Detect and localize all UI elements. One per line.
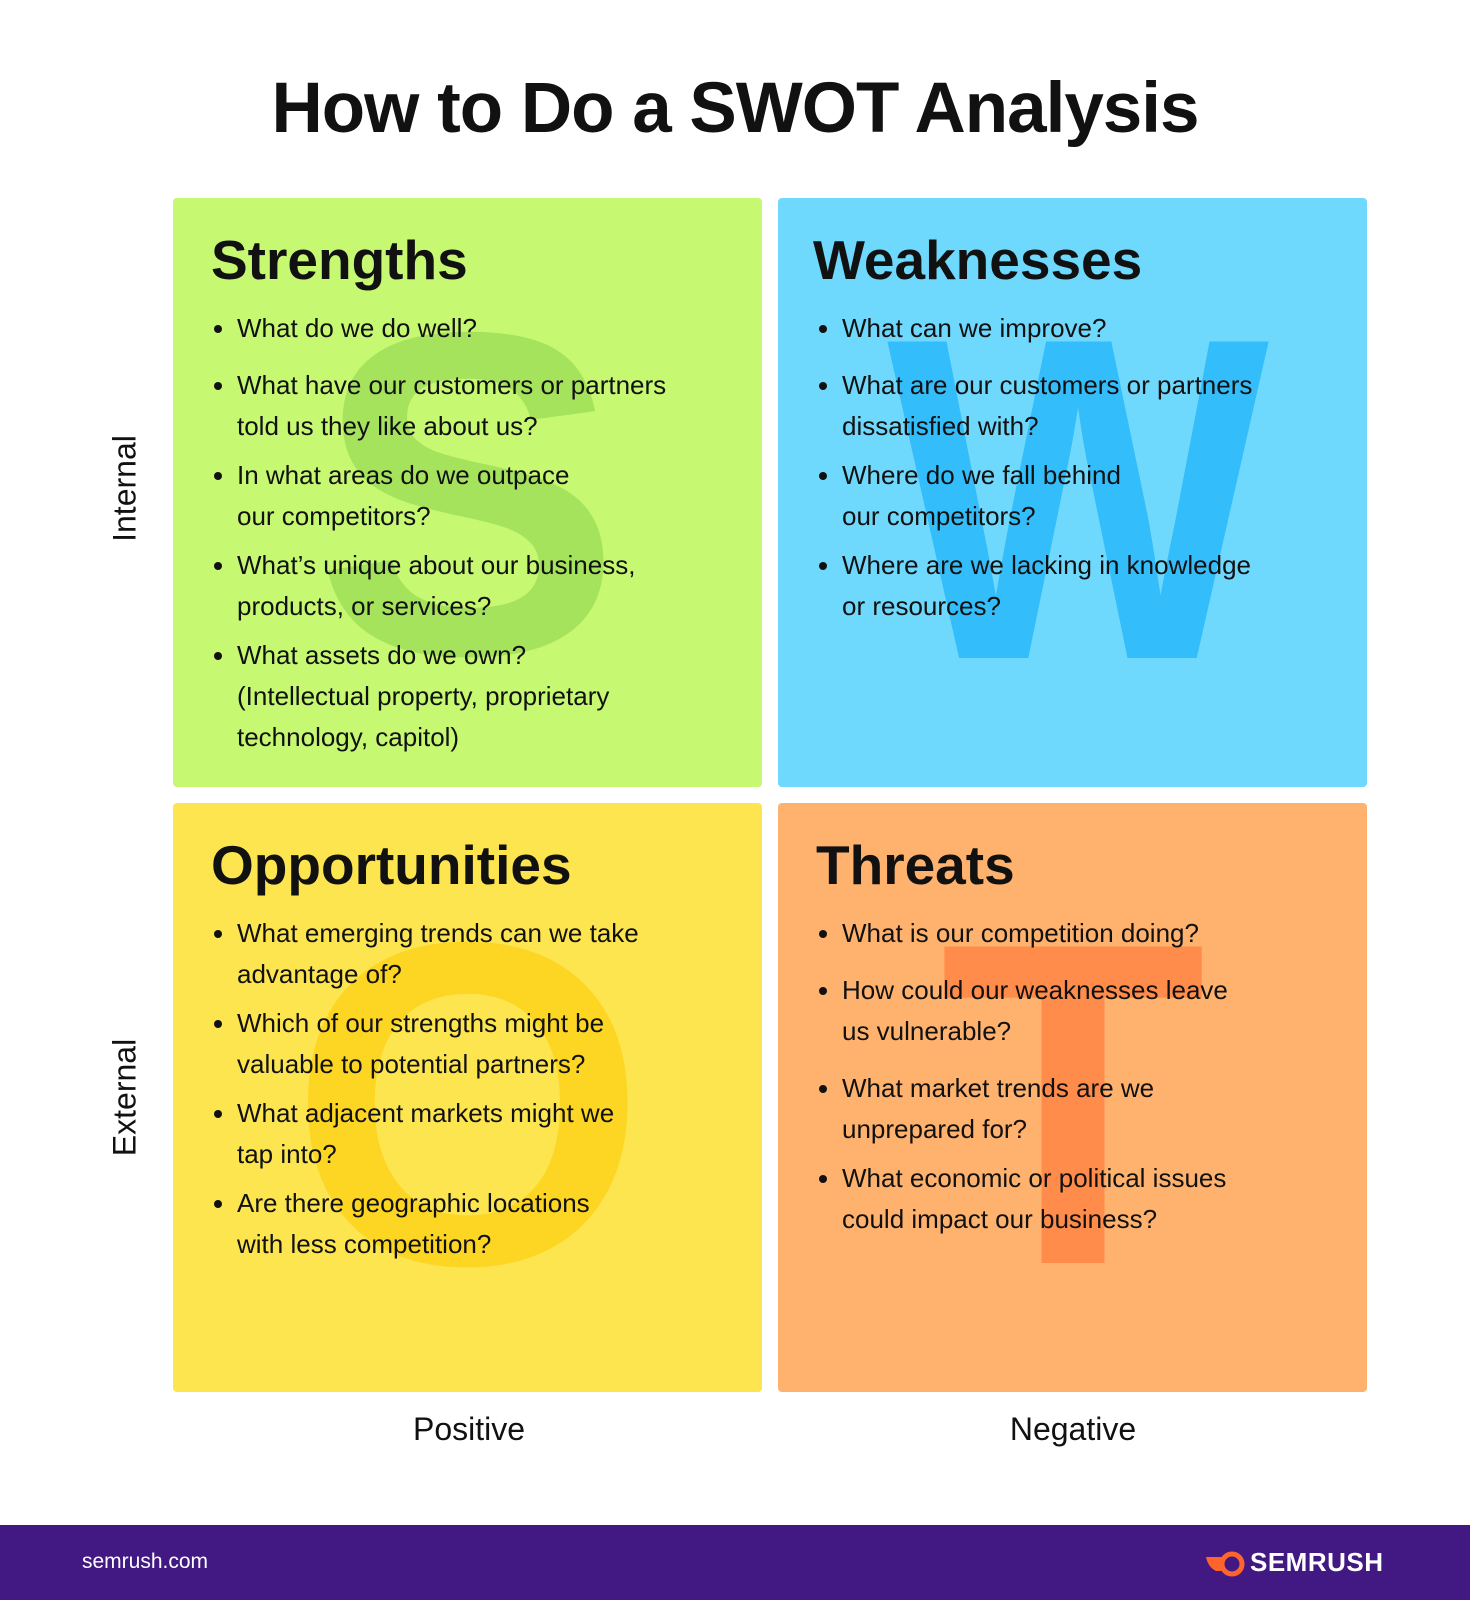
big letter O: O: [289, 848, 647, 1361]
axis label: external: External: [106, 1039, 142, 1156]
list: strengths: What’s unique about our business,: [237, 550, 635, 580]
list: strengths: What have our customers or partners: [237, 370, 666, 400]
list: threats: What economic or political issues: [842, 1163, 1226, 1193]
panel: weaknesses: [778, 198, 1367, 787]
footer: [0, 1525, 1470, 1600]
list: threats: How could our weaknesses leave: [842, 975, 1228, 1005]
list: weaknesses: What can we improve?: [842, 313, 1106, 343]
list: opportunities: Are there geographic locations: [237, 1188, 590, 1218]
list: opportunities: with less competition?: [237, 1229, 491, 1259]
big letter S: S: [315, 238, 621, 751]
list: strengths: products, or services?: [237, 591, 491, 621]
list: weaknesses: our competitors?: [842, 501, 1036, 531]
list: strengths: told us they like about us?: [237, 411, 538, 441]
list: opportunities: Which of our strengths might be: [237, 1008, 604, 1038]
title: How to Do a SWOT Analysis: [271, 69, 1199, 148]
list: threats: unprepared for?: [842, 1114, 1027, 1144]
list: strengths: (Intellectual property, proprietary: [237, 681, 609, 711]
panel: opportunities: [173, 803, 762, 1392]
list: strengths: our competitors?: [237, 501, 431, 531]
axis label: internal: Internal: [106, 435, 142, 542]
list: opportunities: [214, 918, 639, 1259]
list: weaknesses: dissatisfied with?: [842, 411, 1039, 441]
list: weaknesses: [819, 313, 1252, 621]
logo: semrush: SEMRUSH: [1250, 1547, 1384, 1577]
heading: strengths: Strengths: [211, 229, 468, 291]
list: weaknesses: or resources?: [842, 591, 1001, 621]
list: opportunities: What emerging trends can we take: [237, 918, 639, 948]
list: opportunities: tap into?: [237, 1139, 337, 1169]
panel: threats: [778, 803, 1367, 1392]
big letter W: W: [887, 242, 1273, 756]
list: opportunities: What adjacent markets might we: [237, 1098, 614, 1128]
big letter T: T: [940, 848, 1206, 1361]
list: opportunities: valuable to potential partners?: [237, 1049, 585, 1079]
list: weaknesses: Where are we lacking in knowledge: [842, 550, 1251, 580]
heading: weaknesses: Weaknesses: [813, 229, 1142, 291]
list: threats: What market trends are we: [842, 1073, 1154, 1103]
list: threats: [819, 918, 1228, 1234]
list: opportunities: advantage of?: [237, 959, 402, 989]
list: strengths: What do we do well?: [237, 313, 477, 343]
heading: threats: Threats: [816, 834, 1015, 896]
list: weaknesses: Where do we fall behind: [842, 460, 1121, 490]
axis label: positive: Positive: [413, 1411, 525, 1447]
panel: strengths: [173, 198, 762, 787]
axis label: negative: Negative: [1010, 1411, 1136, 1447]
heading: opportunities: Opportunities: [211, 834, 572, 896]
list: strengths: technology, capitol): [237, 722, 459, 752]
list: threats: could impact our business?: [842, 1204, 1157, 1234]
list: threats: What is our competition doing?: [842, 918, 1199, 948]
list: strengths: [214, 313, 666, 752]
footer url: semrush.com: [82, 1550, 208, 1573]
list: threats: us vulnerable?: [842, 1016, 1011, 1046]
list: strengths: What assets do we own?: [237, 640, 526, 670]
list: weaknesses: What are our customers or partners: [842, 370, 1252, 400]
list: strengths: In what areas do we outpace: [237, 460, 569, 490]
